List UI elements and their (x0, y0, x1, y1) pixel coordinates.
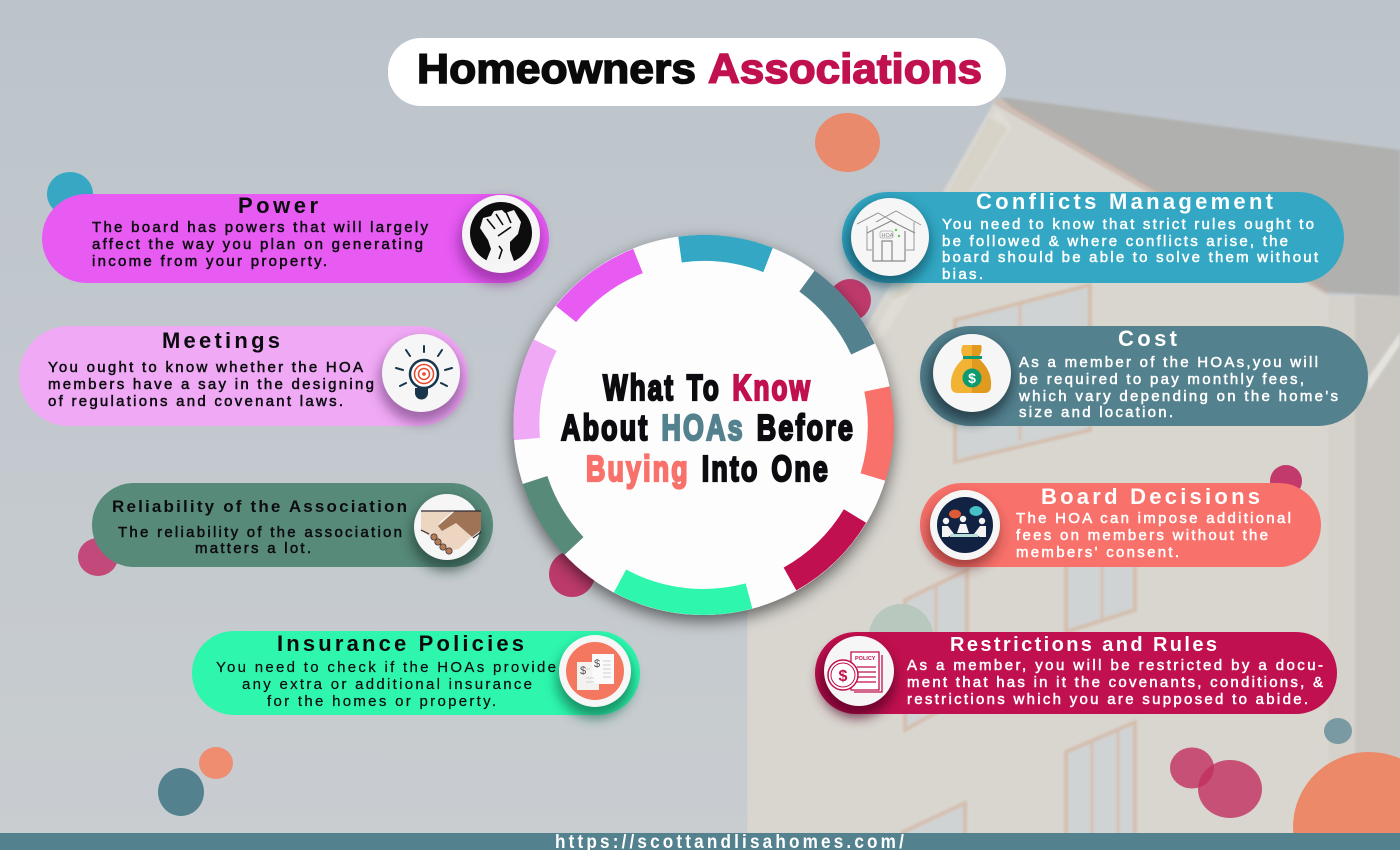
icon: houses: HOA (882, 233, 894, 239)
central circle (514, 235, 894, 615)
panel: restrictions and rules (815, 632, 1337, 718)
title banner (388, 38, 1006, 106)
panel: power: affect the way you plan on generating (92, 236, 423, 253)
central heading: What To Know (603, 367, 812, 408)
panel: cost: which vary depending on the home's (1018, 388, 1338, 405)
icon: policy document (824, 636, 894, 706)
icon: receipts (559, 635, 631, 707)
panel: board decisions: The HOA can impose additional (1016, 510, 1291, 527)
panel: conflicts management: You need to know that strict rules ought to (942, 216, 1314, 233)
panel: board decisions: Board Decisions (1041, 484, 1260, 509)
panel: insurance policies: any extra or additional insurance (242, 676, 532, 693)
icon: receipts: $ (594, 658, 600, 670)
panel: restrictions and rules: ment that has in it the covenants, conditions, & (907, 674, 1323, 691)
panel: insurance policies: for the homes or property. (267, 693, 496, 710)
panel: power (42, 193, 549, 284)
panel: meetings: members have a say in the designing (48, 376, 374, 393)
panel: conflicts management: Conflicts Management (976, 189, 1274, 214)
panel: power: Power (238, 193, 318, 218)
panel: restrictions and rules: restrictions which you are supposed to abide. (907, 691, 1308, 708)
icon: handshake (414, 494, 481, 560)
panel: board decisions: members' consent. (1016, 544, 1179, 561)
icon: light bulb target (382, 334, 460, 412)
windows (903, 285, 1135, 850)
panel: reliability of the association: The reliability of the association (118, 524, 402, 541)
panel: power: The board has powers that will largely (92, 219, 428, 236)
icon: money bag: $ (968, 370, 976, 386)
panel: reliability of the association: matters a lot. (195, 540, 311, 557)
panel: restrictions and rules: Restrictions and Rules (950, 634, 1217, 656)
panel: meetings: of regulations and covenant laws. (48, 393, 343, 410)
icon: fist (462, 195, 540, 273)
panel: reliability of the association: Reliability of the Association (112, 497, 407, 516)
central heading: Buying Into One (586, 448, 830, 489)
panel: conflicts management (842, 189, 1344, 286)
panel: meetings: You ought to know whether the HOA (48, 359, 363, 376)
panel: conflicts management: board should be able to solve them without (942, 249, 1319, 266)
title text (417, 45, 982, 92)
panel: board decisions (920, 483, 1321, 569)
title text: Associations (708, 45, 982, 92)
panel: meetings: Meetings (162, 328, 280, 353)
panel: insurance policies: You need to check if the HOAs provide (216, 659, 556, 676)
panel: cost: size and location. (1019, 404, 1173, 421)
panel: cost (920, 326, 1368, 426)
panel: cost: be required to pay monthly fees, (1019, 371, 1304, 388)
panel: cost: Cost (1118, 326, 1178, 351)
icon: policy document: $ (839, 668, 848, 685)
panel: cost: As a member of the HOAs,you will (1019, 354, 1318, 371)
panel: restrictions and rules: As a member, you will be restricted by a docu- (907, 657, 1323, 674)
title text: Homeowners (417, 45, 696, 92)
footer bar with url (0, 832, 1400, 850)
icon: money bag (933, 334, 1011, 412)
panel: conflicts management: bias. (942, 266, 983, 283)
central heading: About HOAs Before (561, 407, 855, 448)
ring segments (526, 248, 881, 602)
panel: reliability of the association (92, 483, 493, 571)
panel: insurance policies (192, 631, 640, 718)
icon: houses (851, 198, 929, 276)
icon: policy document: POLICY (855, 656, 876, 662)
panel: insurance policies: Insurance Policies (277, 631, 524, 656)
central heading (561, 367, 855, 489)
panel: conflicts management: be followed & where conflicts arise, the (942, 233, 1288, 250)
icon: receipts: $ (580, 665, 586, 677)
panel: power: income from your property. (92, 253, 327, 270)
icon: meeting people (930, 490, 1000, 560)
panel: meetings (19, 326, 468, 426)
panel: board decisions: fees on members without the (1016, 527, 1268, 544)
